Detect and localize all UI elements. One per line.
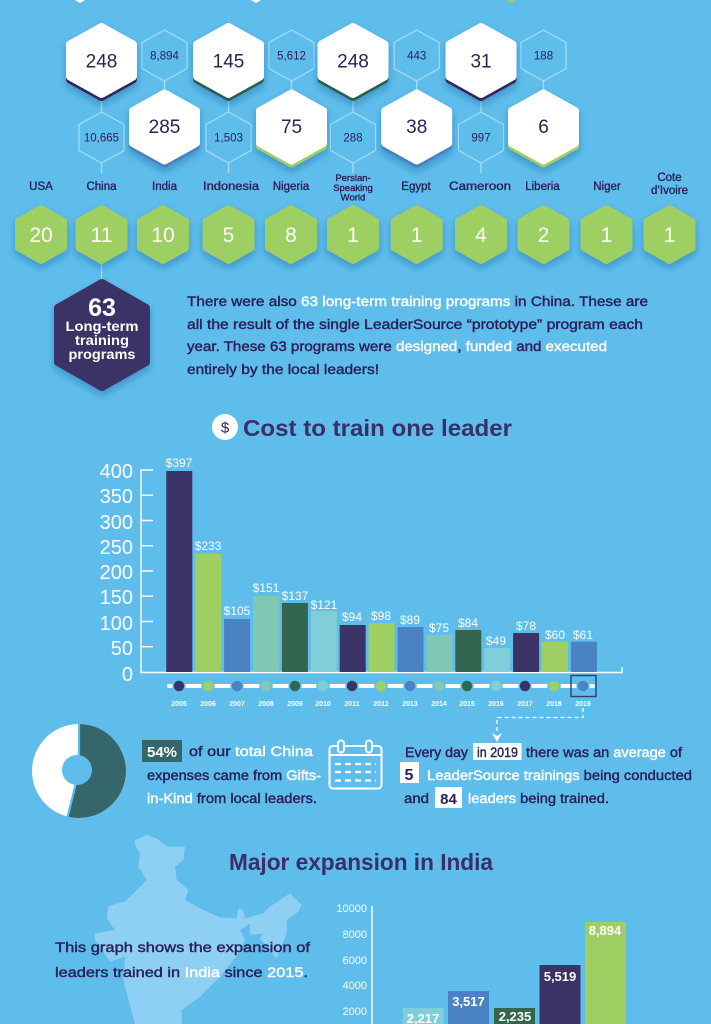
- outlined hexagons: upper row: 188: [534, 50, 553, 62]
- text block: long-term programs in China: all the result of the single LeaderSource “prototype” program each: [187, 317, 643, 332]
- white hexagons: upper row: [70, 27, 512, 97]
- bar chart: India leaders trained: [336, 903, 626, 1024]
- text block: India expansion: leaders trained in India since 2015 .: [55, 965, 308, 980]
- text block: gifts in kind: [142, 740, 321, 806]
- callout hexagon: 63 long-term training programs: Long-term: [66, 319, 138, 334]
- timeline with year markers: 2015: [459, 701, 475, 708]
- timeline with year markers: 2014: [431, 701, 447, 708]
- text block: long-term programs in China: entirely by the local leaders!: [187, 362, 379, 377]
- value labels: $105: [224, 604, 251, 618]
- text block: gifts in kind: in-Kind from local leaders.: [147, 791, 317, 806]
- value labels: $137: [282, 589, 309, 603]
- green training count hexagons: 4: [475, 224, 487, 247]
- icon: dollar coin: $: [221, 420, 230, 436]
- dashed arrow from 2019 to text: [492, 708, 583, 742]
- white hexagons: lower row: 75: [281, 117, 302, 138]
- y axis with labels: 50: [111, 638, 133, 660]
- value labels: $60: [545, 628, 565, 642]
- y axis: 2000: [343, 1006, 367, 1018]
- green training count hexagons: 1: [347, 224, 359, 247]
- bars with values: 3,517: [452, 994, 485, 1009]
- green training count hexagons: 8: [285, 224, 297, 247]
- country labels: India: [152, 181, 178, 193]
- text block: gifts in kind: 54%: [147, 744, 177, 761]
- country labels: Cameroon: [449, 181, 511, 193]
- value labels: $121: [311, 598, 338, 612]
- outlined hexagons: upper row: 8,894: [150, 50, 179, 62]
- bars with values: 2,235: [499, 1009, 531, 1024]
- highlight box around 2019: [571, 676, 596, 696]
- heading: cost to train one leader: Cost to train one leader: [243, 415, 512, 441]
- timeline with year markers: 2010: [315, 701, 331, 708]
- value labels: [166, 456, 593, 648]
- timeline with year markers: 2018: [546, 701, 562, 708]
- timeline with year markers: 2005: [171, 701, 187, 708]
- value labels: $233: [195, 539, 222, 553]
- value labels: $98: [371, 609, 391, 623]
- white hexagons: upper row: 248: [86, 52, 117, 72]
- timeline with year markers: 2012: [373, 701, 389, 708]
- country labels: Indonesia: [203, 181, 260, 193]
- value labels: $84: [458, 616, 478, 630]
- outlined hexagons: lower row: 997: [471, 132, 491, 144]
- green training count hexagons: 10: [151, 224, 175, 247]
- timeline with year markers: 2011: [344, 701, 360, 708]
- white hexagons: lower row: [133, 94, 575, 164]
- y axis with labels: 350: [100, 486, 133, 508]
- timeline with year markers: 2007: [229, 701, 245, 708]
- connector lines between hexagons: [102, 81, 544, 280]
- y axis: 8000: [343, 929, 367, 941]
- country labels: Speaking: [333, 183, 373, 194]
- white hexagons: lower row: 6: [538, 117, 549, 138]
- y axis with labels: [100, 461, 622, 686]
- value labels: $61: [573, 628, 593, 642]
- outlined hexagons: upper row: 443: [407, 50, 426, 62]
- timeline with year markers: 2013: [402, 701, 418, 708]
- bars with values: 5,519: [544, 969, 576, 984]
- timeline with year markers: 2009: [287, 701, 303, 708]
- y axis: 4000: [343, 980, 367, 992]
- outlined hexagons: lower row: 1,503: [214, 132, 243, 144]
- outlined hexagons: lower row: [79, 112, 504, 163]
- text block: long-term programs in China: There were also 63 long-term training programs in China. These are: [187, 294, 648, 309]
- text block: every day in 2019: 84: [440, 791, 457, 808]
- text block: every day in 2019: and: [404, 791, 429, 806]
- top edge fragments of hexagons cut off above: [75, 0, 516, 3]
- outlined hexagons: upper row: 5,612: [277, 50, 306, 62]
- country labels: Cote: [657, 172, 682, 184]
- value labels: $49: [486, 634, 506, 648]
- text block: gifts in kind: of our total China: [189, 744, 314, 759]
- y axis with labels: 300: [100, 512, 133, 534]
- green training count hexagons: 1: [601, 224, 612, 247]
- text block: India expansion: [55, 940, 310, 980]
- icon: calendar: [330, 740, 382, 788]
- country labels: USA: [29, 181, 53, 193]
- value labels: $78: [516, 619, 536, 633]
- text block: long-term programs in China: year. These 63 programs were designed , funded and executed: [187, 339, 607, 354]
- green training count hexagons: 1: [664, 224, 675, 247]
- heading: major expansion in India: Major expansion in India: [229, 849, 493, 875]
- bars with values: 8,894: [589, 923, 622, 938]
- country labels: d’Ivoire: [651, 185, 688, 197]
- y axis with labels: 100: [100, 613, 133, 635]
- y axis with labels: 200: [100, 562, 133, 584]
- value labels: $89: [400, 613, 420, 627]
- y axis: 6000: [343, 955, 367, 967]
- y axis with labels: 250: [100, 537, 133, 559]
- y axis: 10000: [336, 903, 367, 915]
- callout hexagon: 63 long-term training programs: training: [75, 333, 129, 348]
- map: India silhouette: [95, 835, 302, 1024]
- timeline with year markers: [169, 680, 593, 708]
- y axis with labels: 150: [100, 587, 133, 609]
- y axis with labels: 400: [100, 461, 133, 483]
- callout hexagon: 63 long-term training programs: [58, 283, 146, 387]
- green training count hexagons: 5: [223, 224, 234, 247]
- icon: dollar coin: [212, 414, 238, 440]
- country labels: World: [341, 192, 365, 204]
- outlined hexagons: lower row: 10,665: [84, 132, 119, 144]
- callout hexagon: 63 long-term training programs: programs: [68, 347, 136, 362]
- bar chart: cost per leader: [100, 456, 622, 686]
- text block: every day in 2019: in 2019: [477, 745, 518, 760]
- country labels: Persian-: [335, 173, 371, 184]
- white hexagons: lower row: 285: [149, 117, 180, 138]
- country labels: Liberia: [525, 181, 560, 193]
- outlined hexagons: lower row: 288: [343, 132, 363, 144]
- text block: gifts in kind: expenses came from Gifts-: [147, 768, 321, 783]
- white hexagons: upper row: 145: [213, 52, 244, 72]
- country labels: Egypt: [401, 181, 432, 193]
- country labels: Niger: [593, 181, 621, 193]
- callout hexagon: 63 long-term training programs: 63: [88, 294, 116, 322]
- bars: [166, 471, 597, 672]
- white hexagons: upper row: 31: [470, 52, 492, 72]
- timeline with year markers: 2016: [488, 701, 504, 708]
- country labels: [29, 172, 688, 204]
- text block: India expansion: This graph shows the expansion of: [55, 940, 310, 955]
- y axis: [336, 903, 372, 1024]
- text block: every day in 2019: 5: [405, 767, 414, 784]
- text block: every day in 2019: LeaderSource trainings being conducted: [427, 768, 692, 783]
- value labels: $75: [429, 621, 449, 635]
- timeline with year markers: 2019: [575, 701, 591, 708]
- timeline with year markers: 2006: [200, 701, 216, 708]
- text block: long-term programs in China: [187, 294, 648, 377]
- white hexagons: lower row: 38: [406, 117, 427, 138]
- text block: every day in 2019: Every day: [405, 745, 468, 760]
- green training count hexagons: [18, 208, 692, 261]
- text block: every day in 2019: there was an average of: [526, 745, 682, 760]
- donut chart: 54 percent: [32, 722, 126, 819]
- country labels: China: [86, 181, 117, 193]
- green training count hexagons: 20: [29, 224, 53, 247]
- y axis with labels: 0: [122, 664, 133, 686]
- text block: every day in 2019: leaders being trained.: [468, 791, 609, 806]
- green training count hexagons: 11: [91, 224, 112, 247]
- white hexagons: upper row: 248: [337, 52, 369, 72]
- green training count hexagons: 1: [411, 224, 423, 247]
- value labels: $397: [166, 456, 193, 470]
- country labels: Nigeria: [273, 181, 310, 193]
- green training count hexagons: 2: [538, 224, 549, 247]
- text block: every day in 2019: [400, 743, 692, 808]
- timeline with year markers: 2017: [517, 701, 533, 708]
- bars with values: [403, 922, 626, 1024]
- value labels: $151: [253, 581, 280, 595]
- timeline with year markers: 2008: [258, 701, 274, 708]
- outlined hexagons: upper row: [142, 30, 566, 81]
- value labels: $94: [342, 610, 362, 624]
